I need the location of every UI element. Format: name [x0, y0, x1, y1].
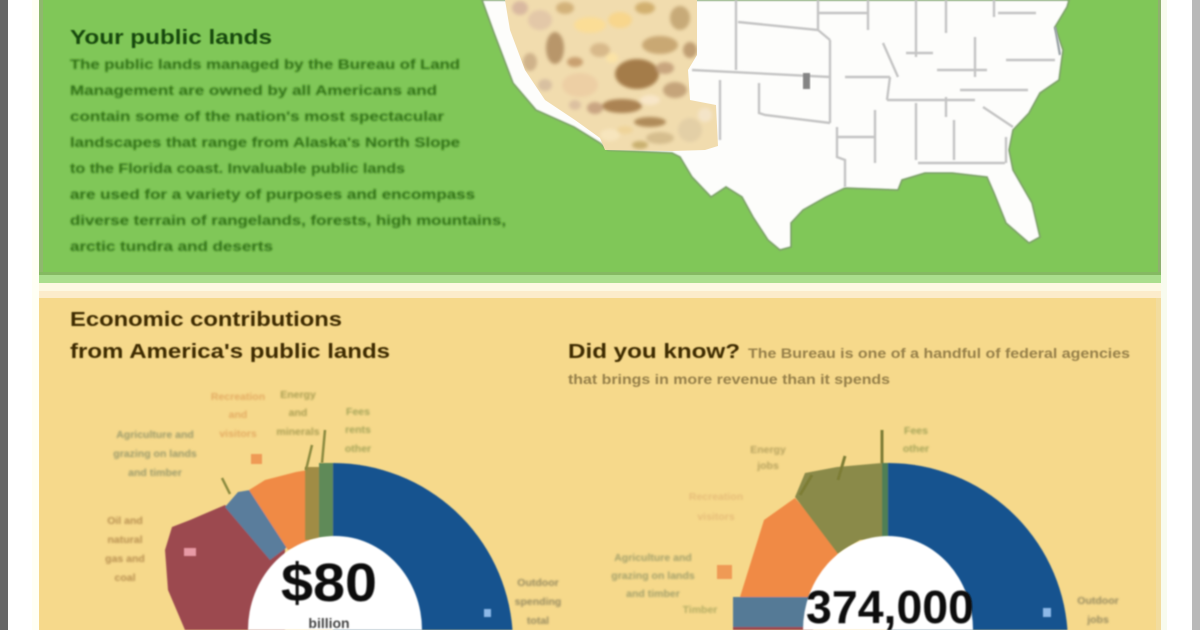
text block: public lands description: diverse terrain of rangelands, forests, high mountains, — [70, 213, 506, 228]
wedge: olive sector — [795, 463, 884, 554]
labels: right chart sectors: other — [903, 443, 929, 455]
text block: public lands description: are used for a variety of purposes and encompass — [70, 187, 475, 202]
heading: economic contributions: from America's public lands — [70, 341, 390, 363]
wedge: blue sector — [333, 463, 512, 630]
center circle: total — [248, 536, 422, 630]
callout: did you know: The Bureau is one of a handful of federal agencies — [748, 346, 1130, 361]
wedge: steel blue sector — [733, 597, 815, 627]
panel: economic contributions — [39, 291, 1161, 630]
labels: left chart sectors: and — [229, 409, 247, 421]
wedge: orange sector — [740, 498, 840, 597]
labels: left chart sectors: other — [345, 443, 371, 455]
labels: right chart sectors: Fees — [904, 425, 928, 437]
center circle: total — [803, 536, 973, 630]
wedge: red sector — [165, 505, 285, 630]
labels: right chart sectors: Outdoor — [1077, 595, 1119, 607]
labels: left chart sectors — [105, 389, 561, 627]
map: United States — [482, 0, 1069, 250]
labels: right chart sectors: grazing on lands — [611, 570, 695, 582]
labels: right chart sectors: Agriculture and — [614, 552, 692, 564]
labels: right chart sectors: Timber — [683, 604, 717, 616]
labels: left chart sectors: Energy — [280, 389, 316, 401]
labels: left chart sectors: Oil and — [107, 515, 143, 527]
labels: left chart sectors: coal — [114, 572, 136, 584]
chart: economic output donut — [105, 389, 561, 630]
labels: left chart sectors: natural — [107, 534, 143, 546]
text block: public lands description: Management are owned by all Americans and — [70, 83, 437, 98]
chart accents — [184, 430, 491, 617]
labels: right chart sectors — [611, 425, 1119, 626]
labels: right chart sectors: jobs — [756, 460, 779, 472]
map: location marker — [803, 73, 810, 89]
chart: jobs donut — [611, 425, 1119, 630]
labels: left chart sectors: grazing on lands — [113, 448, 197, 460]
map: state boundaries — [692, 0, 1060, 187]
labels: right chart sectors: and timber — [626, 588, 680, 600]
wedge: orange sector — [249, 470, 310, 550]
wedge: blue sector — [888, 463, 1068, 630]
text block: public lands description: The public lands managed by the Bureau of Land — [70, 57, 460, 72]
wedge: red sector — [733, 626, 813, 630]
map: western terrain — [505, 0, 718, 151]
labels: left chart sectors: minerals — [276, 426, 320, 438]
labels: left chart sectors: gas and — [105, 553, 145, 565]
labels: left chart sectors: Outdoor — [517, 577, 559, 589]
labels: left chart sectors: and — [289, 407, 307, 419]
heading: economic contributions: Economic contributions — [70, 309, 342, 331]
callout: did you know: Did you know? — [568, 341, 740, 363]
labels: left chart sectors: total — [527, 615, 549, 627]
callout: did you know — [568, 341, 1130, 387]
labels: right chart sectors: visitors — [697, 511, 735, 523]
text block: public lands description: landscapes that range from Alaska's North Slope — [70, 135, 461, 150]
wedge: olive sector — [305, 467, 319, 540]
labels: right chart sectors: jobs — [1086, 614, 1109, 626]
heading: economic contributions — [70, 309, 390, 363]
labels: left chart sectors: and timber — [128, 467, 182, 479]
labels: right chart sectors: Recreation — [689, 491, 743, 503]
wedge: steel blue sector — [225, 490, 290, 560]
labels: left chart sectors: Fees — [346, 406, 370, 418]
panel: your public lands — [39, 0, 1161, 291]
chart accents — [717, 565, 1051, 617]
labels: left chart sectors: visitors — [219, 428, 257, 440]
labels: left chart sectors: Recreation — [211, 391, 265, 403]
text block: public lands description: contain some of the nation's most spectacular — [70, 109, 445, 124]
callout: did you know: that brings in more revenue than it spends — [568, 372, 890, 387]
wedge: green sector — [882, 463, 888, 538]
heading: your public lands: Your public lands — [70, 27, 272, 49]
wedge: green sector — [319, 463, 333, 538]
text block: public lands description — [70, 57, 506, 254]
value: 80 billion: $80 — [281, 553, 377, 613]
text block: public lands description: to the Florida coast. Invaluable public lands — [70, 161, 405, 176]
text block: public lands description: arctic tundra and deserts — [70, 239, 273, 254]
labels: right chart sectors: Energy — [750, 444, 786, 456]
labels: left chart sectors: rents — [345, 424, 371, 436]
labels: left chart sectors: Agriculture and — [116, 429, 194, 441]
labels: left chart sectors: spending — [515, 596, 561, 608]
